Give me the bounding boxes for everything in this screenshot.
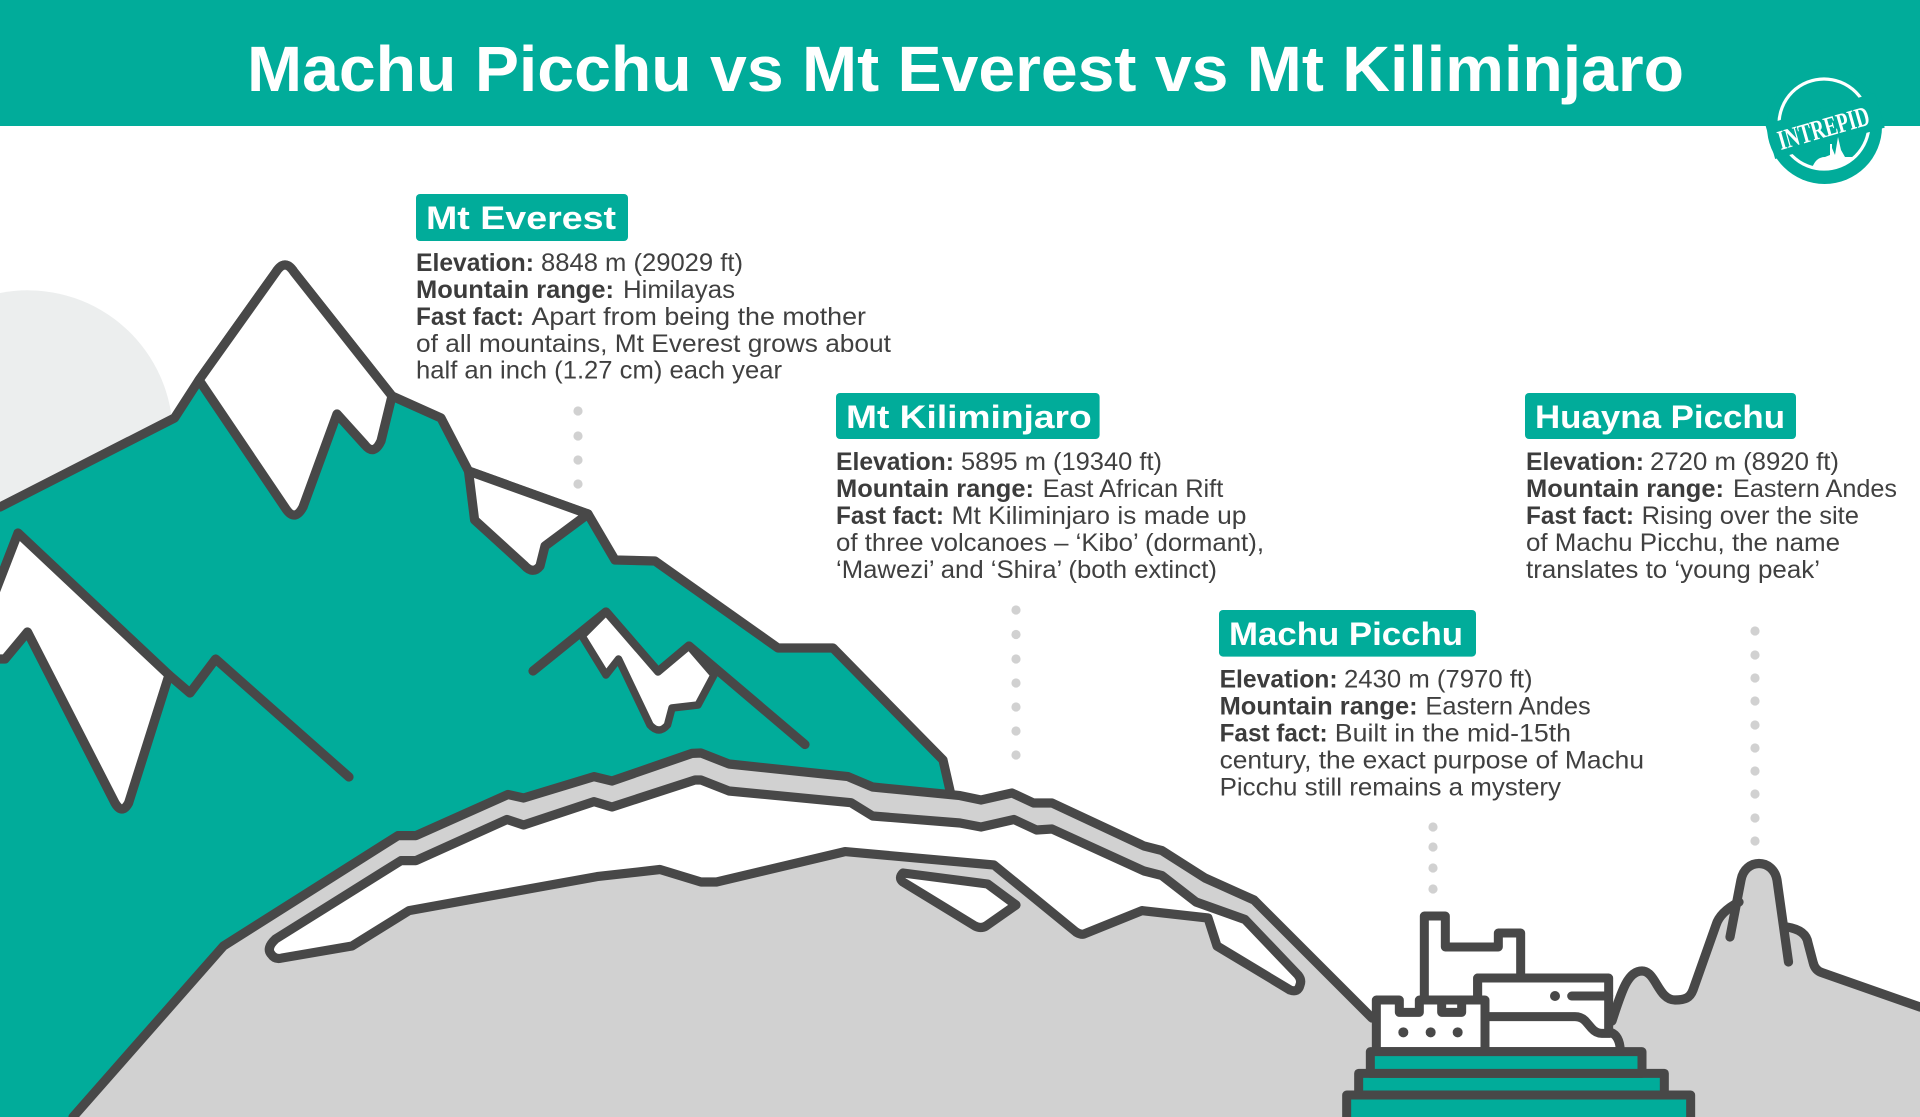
centre ridge with snow bbox=[533, 612, 805, 744]
citadel tower bbox=[1376, 1000, 1485, 1052]
glacier snow band bbox=[269, 780, 1301, 991]
tag: Huayna Picchu bbox=[1525, 393, 1796, 439]
mountain: Mt Kiliminjaro bbox=[73, 753, 1372, 1117]
info block: Machu Picchu: 2430 m (7970 ft) bbox=[1344, 666, 1533, 694]
info block: Mt Everest bbox=[416, 194, 891, 384]
info block: Machu Picchu: Fast fact: bbox=[1220, 720, 1328, 748]
building window bbox=[1550, 991, 1609, 1001]
Machu Picchu citadel bbox=[1347, 916, 1691, 1117]
tower windows bbox=[1398, 1027, 1463, 1037]
info block: Machu Picchu: Built in the mid-15th bbox=[1335, 720, 1571, 748]
dotted leader: Machu Picchu bbox=[1428, 822, 1438, 894]
info block: Mt Kiliminjaro: Fast fact: bbox=[836, 502, 944, 530]
info block: Mt Kiliminjaro: of three volcanoes – ‘Kibo’ (dormant), bbox=[836, 529, 1264, 557]
info block: Mt Kiliminjaro: Mountain range: bbox=[836, 475, 1034, 503]
info block: Mt Kiliminjaro: Mt Kiliminjaro is made up bbox=[952, 502, 1246, 530]
title: Machu Picchu vs Mt Everest vs Mt Kiliminjaro bbox=[247, 33, 1684, 105]
citadel back wall bbox=[1424, 916, 1521, 1000]
info block: Machu Picchu: Eastern Andes bbox=[1425, 692, 1591, 720]
info block: Mt Everest: Mountain range: bbox=[416, 276, 614, 304]
info block: Huayna Picchu: of Machu Picchu, the name bbox=[1526, 529, 1840, 557]
info block: Machu Picchu: century, the exact purpose of Machu bbox=[1220, 746, 1644, 774]
tag: Mt Everest bbox=[416, 194, 628, 241]
info block: Mt Everest: Apart from being the mother bbox=[532, 303, 866, 331]
info block: Huayna Picchu: Eastern Andes bbox=[1733, 475, 1897, 503]
info block: Huayna Picchu: 2720 m (8920 ft) bbox=[1650, 448, 1839, 476]
info block: Machu Picchu: Elevation: bbox=[1220, 666, 1338, 694]
info block: Huayna Picchu: Elevation: bbox=[1526, 448, 1644, 476]
header banner bbox=[0, 0, 1920, 126]
info block: Mt Kiliminjaro bbox=[836, 393, 1264, 584]
citadel right building bbox=[1478, 978, 1620, 1052]
info block: Machu Picchu: Mountain range: bbox=[1220, 692, 1418, 720]
info block: Mt Kiliminjaro: ‘Mawezi’ and ‘Shira’ (both extinct) bbox=[836, 556, 1217, 584]
info block: Mt Kiliminjaro: 5895 m (19340 ft) bbox=[961, 448, 1162, 476]
info block: Huayna Picchu: Fast fact: bbox=[1526, 502, 1634, 530]
info block: Mt Everest: half an inch (1.27 cm) each year bbox=[416, 356, 782, 384]
tag: Mt Kiliminjaro bbox=[836, 393, 1100, 439]
tag: Machu Picchu bbox=[1219, 610, 1476, 657]
steps bbox=[1347, 1052, 1691, 1117]
info block: Huayna Picchu: Rising over the site bbox=[1642, 502, 1859, 530]
info block: Mt Kiliminjaro: Elevation: bbox=[836, 448, 954, 476]
info block: Mt Everest: Elevation: bbox=[416, 249, 534, 277]
info block: Huayna Picchu bbox=[1525, 393, 1897, 584]
tag: Mt Kiliminjaro: Mt Kiliminjaro bbox=[846, 399, 1092, 435]
dotted leader: Kiliminjaro bbox=[1011, 605, 1021, 760]
icon: Intrepid logo badge: INTREPID bbox=[1774, 101, 1873, 157]
snow cap: Everest summit bbox=[199, 265, 392, 515]
snow crevasse patch bbox=[900, 873, 1016, 928]
dotted leader: Huayna Picchu bbox=[1750, 626, 1760, 846]
info block: Machu Picchu: Picchu still remains a mystery bbox=[1220, 774, 1562, 802]
mountain: Mt Everest bbox=[0, 265, 951, 1117]
info block: Huayna Picchu: translates to ‘young peak’ bbox=[1526, 556, 1820, 584]
tag: Huayna Picchu: Huayna Picchu bbox=[1535, 399, 1785, 435]
tag: Mt Everest: Mt Everest bbox=[426, 200, 616, 236]
info block: Mt Everest: of all mountains, Mt Everest grows about bbox=[416, 330, 891, 358]
snow patch: Everest shoulder bbox=[468, 471, 588, 570]
info block: Mt Everest: Fast fact: bbox=[416, 303, 524, 331]
tag: Machu Picchu: Machu Picchu bbox=[1229, 616, 1463, 652]
mountain: Huayna Picchu bbox=[1340, 864, 1920, 1117]
left ridge with snow bbox=[0, 533, 349, 809]
building terrace line bbox=[1485, 1017, 1610, 1033]
icon: Intrepid logo badge bbox=[1765, 69, 1885, 184]
info block: Machu Picchu bbox=[1219, 610, 1644, 802]
sun circle bbox=[0, 290, 172, 510]
info block: Mt Everest: Himilayas bbox=[623, 276, 735, 304]
info block: Mt Kiliminjaro: East African Rift bbox=[1043, 475, 1223, 503]
info block: Huayna Picchu: Mountain range: bbox=[1526, 475, 1724, 503]
info block: Mt Everest: 8848 m (29029 ft) bbox=[541, 249, 743, 277]
dotted leader: Everest bbox=[573, 406, 583, 489]
